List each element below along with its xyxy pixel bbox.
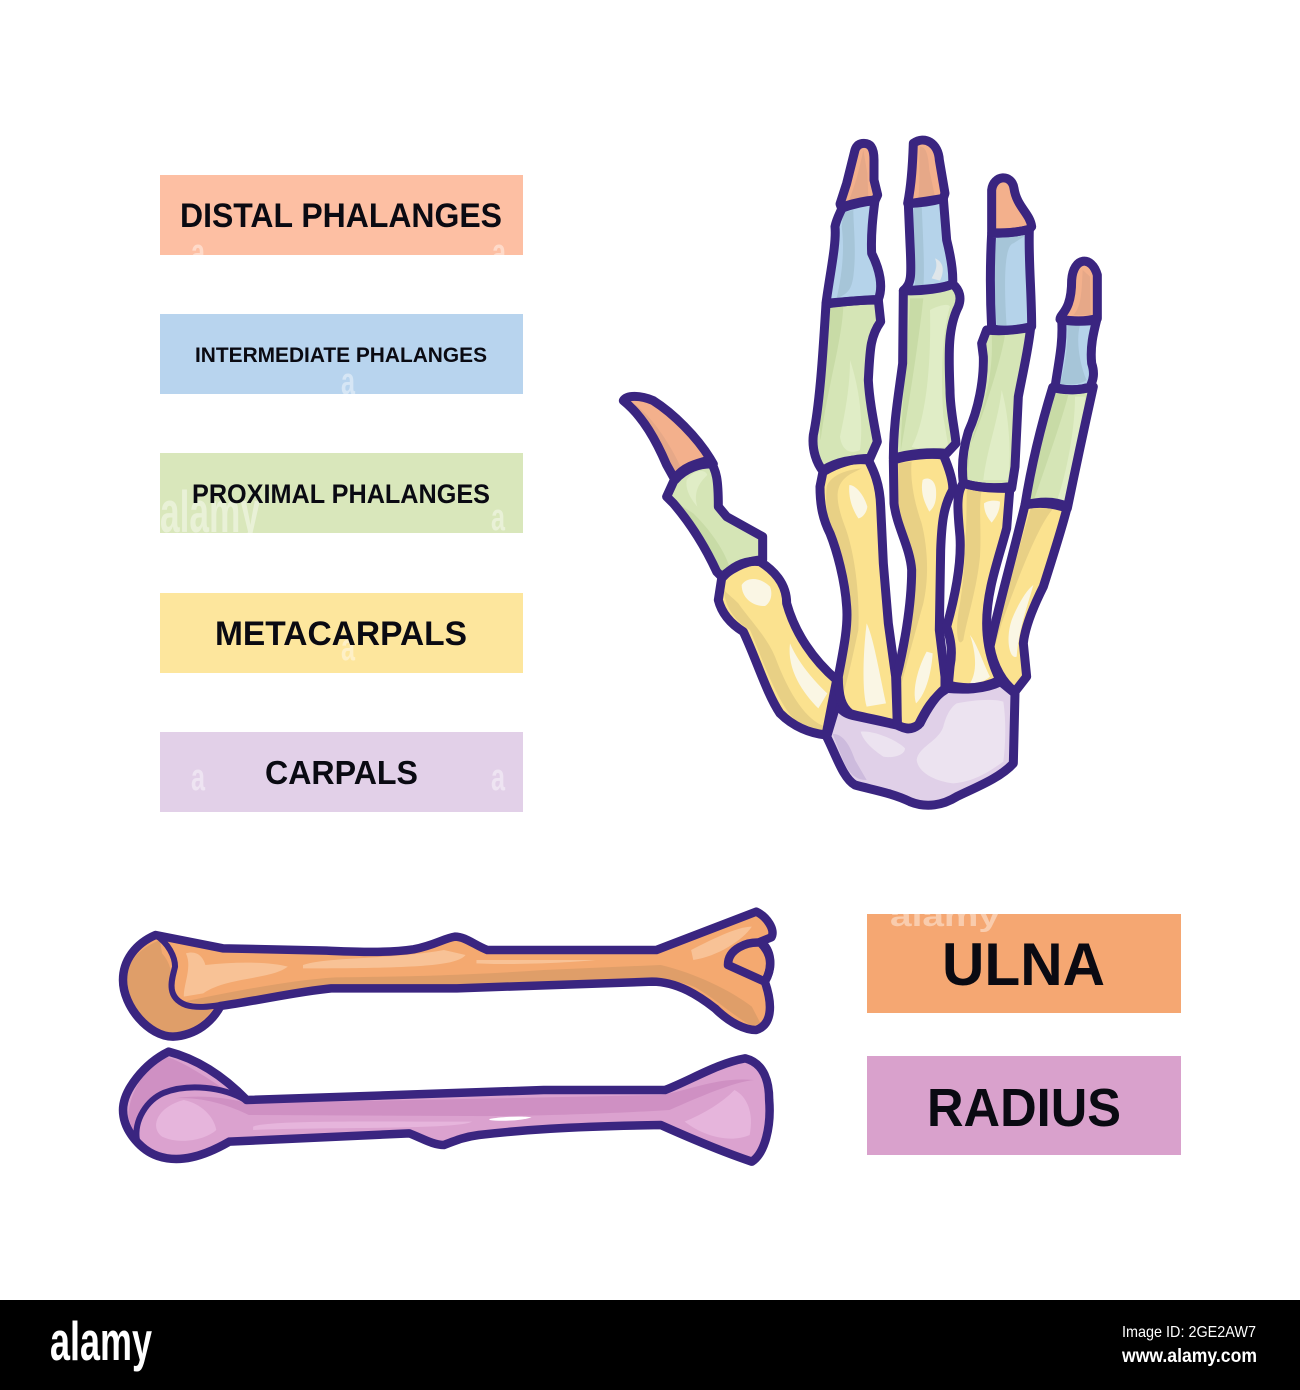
label: distal phalanges <box>160 175 523 274</box>
finger 3 metacarpal <box>947 483 1010 688</box>
finger 1 distal phalanx <box>840 143 878 208</box>
footer logo: alamy <box>50 1310 152 1372</box>
illustration: hand skeleton <box>623 140 1097 805</box>
label: carpals: a <box>491 757 506 799</box>
thumb metacarpal <box>718 561 837 735</box>
thumb distal phalanx <box>623 396 713 480</box>
illustration: ulna bone <box>123 912 772 1037</box>
finger 4 metacarpal <box>990 502 1067 692</box>
label: metacarpals: a <box>341 627 356 669</box>
label: proximal phalanges <box>160 453 523 545</box>
finger 2 intermediate phalanx <box>903 198 953 291</box>
label: radius: RADIUS <box>927 1078 1121 1138</box>
label: ulna: alamy <box>890 900 1000 933</box>
label: distal phalanges: DISTAL PHALANGES <box>180 197 502 235</box>
finger 3 intermediate phalanx <box>990 229 1032 330</box>
image id: Image ID: 2GE2AW7 <box>1122 1324 1256 1341</box>
finger 4 intermediate phalanx <box>1055 320 1097 390</box>
finger 3 distal phalanx <box>992 178 1032 233</box>
label: intermediate phalanges: a <box>341 361 356 403</box>
finger 4 proximal phalanx <box>1025 387 1093 508</box>
hand bone outlines <box>623 140 1097 805</box>
finger 4 distal phalanx <box>1060 261 1097 321</box>
finger 1 metacarpal <box>820 460 897 725</box>
carpals <box>827 682 1015 805</box>
finger 2 metacarpal <box>893 454 953 729</box>
label: distal phalanges: a <box>492 232 507 274</box>
finger 2 proximal phalanx <box>893 284 960 458</box>
label: ulna: ULNA <box>942 931 1105 998</box>
label: intermediate phalanges <box>160 314 523 403</box>
thumb proximal phalanx <box>667 460 763 577</box>
label: metacarpals: METACARPALS <box>215 615 467 653</box>
label: carpals: a <box>191 757 206 799</box>
label: proximal phalanges: PROXIMAL PHALANGES <box>192 479 490 509</box>
finger 2 distal phalanx <box>908 140 945 203</box>
label: proximal phalanges: a <box>491 497 506 539</box>
label: distal phalanges: a <box>191 232 206 274</box>
finger 1 proximal phalanx <box>813 300 881 472</box>
website: www.alamy.com <box>1121 1346 1257 1367</box>
label: radius <box>867 1056 1181 1155</box>
label: carpals: CARPALS <box>265 754 418 791</box>
finger 1 intermediate phalanx <box>826 200 881 303</box>
label: intermediate phalanges: INTERMEDIATE PHALANGES <box>195 344 487 367</box>
label: carpals <box>160 732 523 812</box>
illustration: radius bone <box>123 1052 770 1162</box>
finger 3 proximal phalanx <box>962 327 1031 488</box>
label: metacarpals <box>160 593 523 673</box>
label: ulna <box>867 900 1181 1013</box>
footer bar <box>0 1300 1300 1390</box>
label: proximal phalanges: alamy <box>160 480 260 545</box>
